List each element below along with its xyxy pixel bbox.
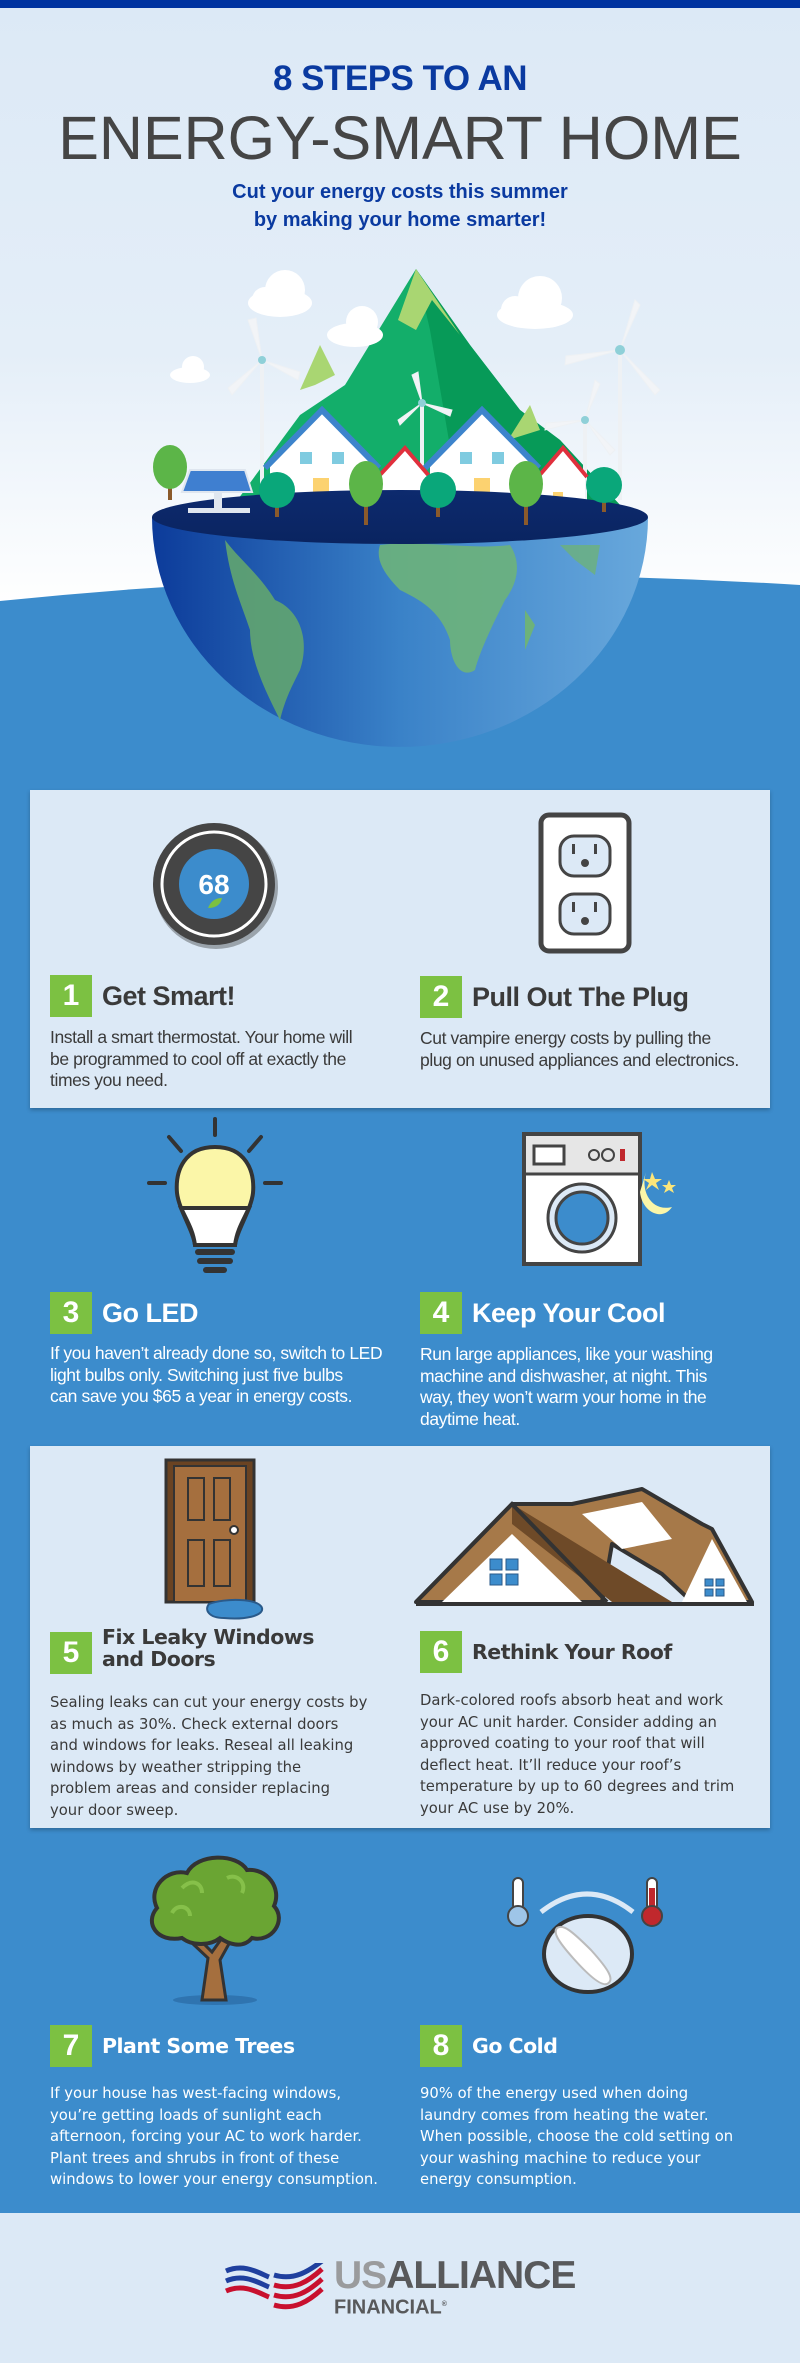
step 3 text xyxy=(50,1343,382,1406)
hero illustration: globe xyxy=(0,269,800,746)
step 8 heading: Go Cold xyxy=(472,2034,557,2058)
step 7 heading: 7 xyxy=(63,2029,79,2062)
step 7 text xyxy=(50,2085,378,2188)
step 1 heading xyxy=(50,975,235,1017)
step 7 heading: Plant Some Trees xyxy=(102,2034,295,2058)
turbines xyxy=(228,300,660,500)
step 1 text: Install a smart thermostat. Your home will xyxy=(50,1027,352,1047)
step 5 text: Sealing leaks can cut your energy costs by xyxy=(50,1694,367,1711)
houses xyxy=(265,410,587,508)
step 8 text: When possible, choose the cold setting on xyxy=(420,2128,733,2145)
step 1 heading: Get Smart! xyxy=(102,981,235,1011)
step 2 text: plug on unused appliances and electronics. xyxy=(420,1050,739,1070)
icon: tree xyxy=(150,1856,281,2005)
step 7 text: windows to lower your energy consumption. xyxy=(50,2171,378,2188)
step 7 text: you’re getting loads of sunlight each xyxy=(50,2107,322,2124)
step 5 heading: 5 xyxy=(63,1636,79,1669)
step 3 text: If you haven’t already done so, switch to LED xyxy=(50,1343,382,1363)
step 2 text xyxy=(420,1028,739,1070)
icon: door xyxy=(164,1458,264,1620)
step 7 text: afternoon, forcing your AC to work harder. xyxy=(50,2128,362,2145)
step 6 text: your AC unit harder. Consider adding an xyxy=(420,1714,717,1731)
step 4 text: way, they won’t warm your home in the xyxy=(420,1387,706,1407)
icon: flag waves xyxy=(225,2263,324,2310)
logo: FINANCIAL® xyxy=(334,2297,447,2319)
step 5 heading: Fix Leaky Windows xyxy=(102,1625,314,1649)
subtitle xyxy=(232,181,568,231)
hero background xyxy=(0,0,800,640)
step 2 heading xyxy=(420,976,688,1018)
step 4 text xyxy=(420,1344,713,1428)
step 6 text xyxy=(420,1692,734,1817)
icon: roof xyxy=(414,1487,754,1606)
step 5 text: windows by weather stripping the xyxy=(50,1759,301,1776)
icon: outlet xyxy=(538,812,632,954)
step 3 heading xyxy=(50,1292,198,1334)
step 6 text: your AC use by 20%. xyxy=(420,1800,574,1817)
step 8 text: laundry comes from heating the water. xyxy=(420,2107,709,2124)
icon: thermostat xyxy=(153,823,278,949)
mountains xyxy=(230,269,620,510)
step 6 heading: Rethink Your Roof xyxy=(472,1640,672,1664)
clouds xyxy=(170,270,573,383)
ground xyxy=(0,576,800,790)
top bar xyxy=(0,0,800,8)
step 8 text: your washing machine to reduce your xyxy=(420,2150,701,2167)
panel: steps 1 and 2 xyxy=(30,790,770,1108)
step 4 text: machine and dishwasher, at night. This xyxy=(420,1366,707,1386)
step 2 heading: Pull Out The Plug xyxy=(472,982,688,1012)
step 5 text: problem areas and consider replacing xyxy=(50,1780,330,1797)
step 1 text: be programmed to cool off at exactly the xyxy=(50,1048,346,1068)
step 5 text: as much as 30%. Check external doors xyxy=(50,1716,338,1733)
icon: light bulb xyxy=(147,1117,283,1273)
step 6 heading xyxy=(420,1631,672,1673)
icon: washing machine xyxy=(522,1132,676,1266)
step 5 heading: and Doors xyxy=(102,1647,215,1671)
step 2 heading: 2 xyxy=(433,980,449,1013)
step 3 text: can save you $65 a year in energy costs. xyxy=(50,1386,352,1406)
step 6 text: Dark-colored roofs absorb heat and work xyxy=(420,1692,723,1709)
step 6 text: approved coating to your roof that will xyxy=(420,1735,705,1752)
step 5 heading xyxy=(50,1625,314,1674)
step 8 heading: 8 xyxy=(433,2029,449,2062)
step 1 heading: 1 xyxy=(63,979,79,1012)
footer xyxy=(0,2213,800,2363)
step 5 text: and windows for leaks. Reseal all leaking xyxy=(50,1737,353,1754)
step 5 text xyxy=(50,1694,367,1819)
step 4 text: Run large appliances, like your washing xyxy=(420,1344,713,1364)
step 1 text xyxy=(50,1027,352,1090)
icon: temperature dial xyxy=(507,1877,663,1994)
step 6 text: deflect heat. It’ll reduce your roof’s xyxy=(420,1757,681,1774)
step 2 text: Cut vampire energy costs by pulling the xyxy=(420,1028,711,1048)
step 1 text: times you need. xyxy=(50,1070,168,1090)
icon: thermostat: 68 xyxy=(198,869,230,900)
step 8 text: energy consumption. xyxy=(420,2171,577,2188)
panel: steps 5 and 6 xyxy=(30,1446,770,1828)
subtitle: Cut your energy costs this summer xyxy=(232,181,568,203)
trees and solar xyxy=(153,445,622,525)
step 8 heading xyxy=(420,2025,557,2067)
step 6 text: temperature by up to 60 degrees and trim xyxy=(420,1778,734,1795)
title small: 8 STEPS TO AN xyxy=(273,59,527,98)
step 7 heading xyxy=(50,2025,295,2067)
step 7 text: Plant trees and shrubs in front of these xyxy=(50,2150,339,2167)
step 4 heading: 4 xyxy=(433,1296,449,1329)
step 3 text: light bulbs only. Switching just five bulbs xyxy=(50,1364,343,1384)
top rim xyxy=(152,490,648,544)
step 4 text: daytime heat. xyxy=(420,1408,520,1428)
subtitle: by making your home smarter! xyxy=(254,209,546,231)
globe half xyxy=(152,517,648,747)
step 8 text xyxy=(420,2085,733,2188)
title large: ENERGY-SMART HOME xyxy=(58,104,742,172)
step 4 heading: Keep Your Cool xyxy=(472,1298,665,1328)
step 7 text: If your house has west-facing windows, xyxy=(50,2085,341,2102)
step 4 heading xyxy=(420,1292,665,1334)
step 6 heading: 6 xyxy=(433,1635,449,1668)
step 5 text: your door sweep. xyxy=(50,1802,178,1819)
step 3 heading: Go LED xyxy=(102,1298,198,1328)
logo xyxy=(225,2254,575,2319)
logo: USALLIANCE xyxy=(334,2254,575,2297)
step 8 text: 90% of the energy used when doing xyxy=(420,2085,688,2102)
step 3 heading: 3 xyxy=(63,1296,79,1329)
